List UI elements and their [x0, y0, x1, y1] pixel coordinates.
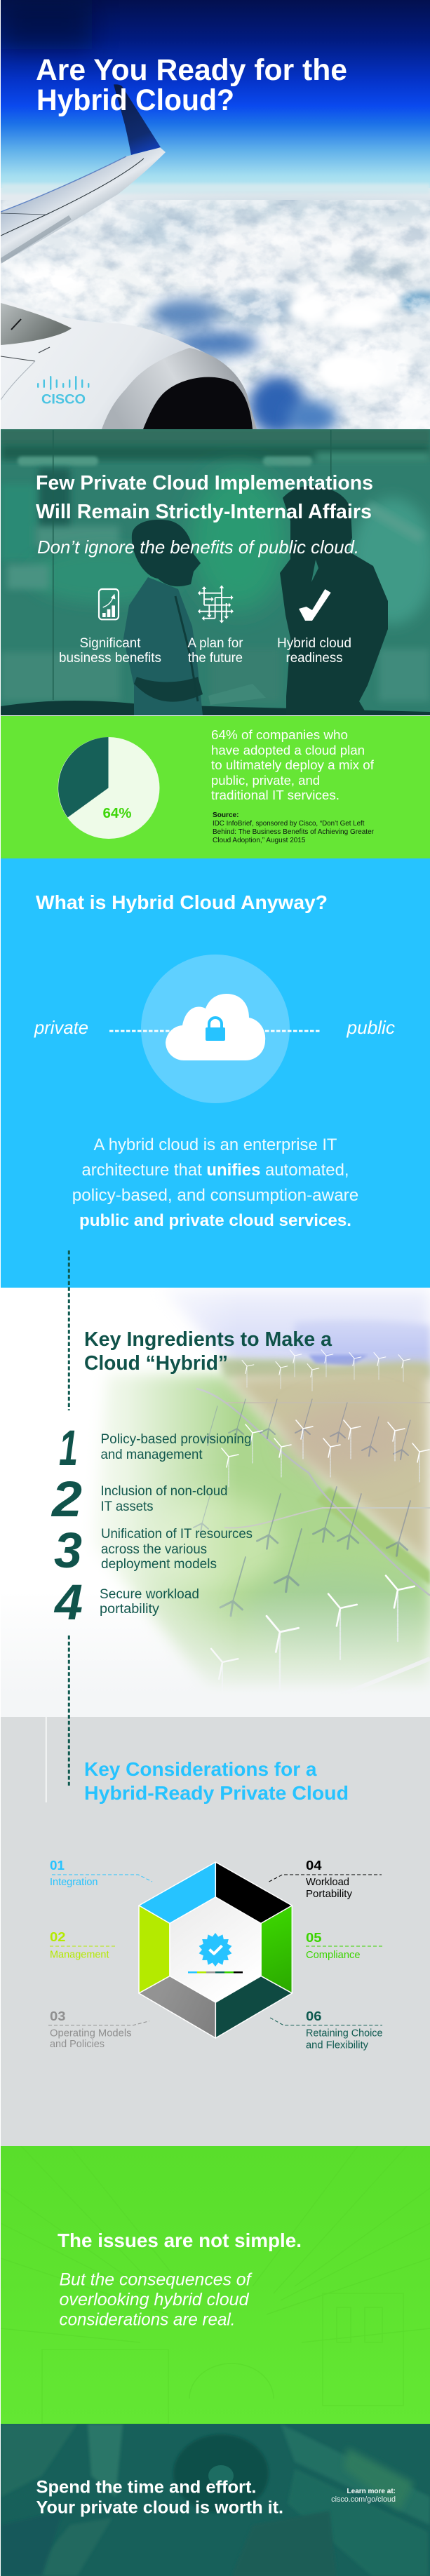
list item 3: across the various [101, 1542, 207, 1557]
italic text [59, 2271, 253, 2329]
callout 01 integration: Integration [50, 1877, 98, 1888]
list item 2: 2 [51, 1472, 82, 1528]
statistic text [211, 727, 375, 802]
callout 03 operating models [48, 2009, 149, 2050]
panel: few private cloud implementations [1, 429, 430, 715]
callout 04 workload portability: Portability [306, 1889, 353, 1900]
icon: cisco logo: CISCO [41, 391, 86, 407]
icon: engine [1, 298, 257, 429]
icon: check mark [299, 589, 331, 621]
benefit: significant business benefits: business benefits [59, 651, 161, 666]
callout 05 compliance: Compliance [306, 1950, 361, 1961]
list item 4: portability [100, 1602, 160, 1617]
photo texture: factory coil tinted teal [1, 2424, 430, 2576]
title [36, 54, 347, 117]
statistic text: 64% of companies who [211, 727, 348, 742]
closing message: Spend the time and effort. [36, 2478, 257, 2497]
list item 1: Policy-based provisioning [101, 1432, 251, 1447]
pie chart: 64 percent: 64% [102, 805, 132, 821]
list item 3: deployment models [101, 1557, 217, 1572]
heading: What is Hybrid Cloud Anyway? [36, 891, 328, 913]
callout 01 integration: 01 [50, 1858, 65, 1873]
italic text: overlooking hybrid cloud [59, 2291, 250, 2309]
diagram: private to public through secure cloud [34, 955, 395, 1103]
closing message [36, 2478, 283, 2518]
hexagon diagram [139, 1862, 292, 2038]
source note: Behind: The Business Benefits of Achieving Greater [213, 828, 375, 836]
subheading: Don’t ignore the benefits of public cloud. [37, 538, 359, 558]
panel: key considerations [1, 1717, 430, 2146]
benefit: significant business benefits: Significant [80, 636, 141, 651]
diagram: private to public through secure cloud: public [346, 1018, 395, 1038]
callout 05 compliance: 05 [306, 1930, 321, 1945]
italic text: But the consequences of [59, 2271, 253, 2290]
learn more link: Learn more at: [347, 2488, 396, 2495]
panel: what is hybrid cloud [1, 858, 430, 1288]
panel: the issues are not simple [1, 2146, 430, 2424]
list item 3: 3 [54, 1523, 82, 1579]
silhouette: man [280, 486, 388, 715]
statistic text: traditional IT services. [211, 788, 340, 802]
panel: hero [1, 0, 430, 442]
icon: verified badge [199, 1933, 231, 1967]
callout 06 retaining choice [270, 2009, 383, 2051]
heading [84, 1758, 349, 1804]
callout 03 operating models: and Policies [50, 2039, 105, 2050]
benefit: hybrid cloud readiness: readiness [286, 651, 342, 666]
definition text: public and private cloud services. [79, 1211, 351, 1230]
italic text: considerations are real. [59, 2310, 236, 2329]
statistic text: to ultimately deploy a mix of [211, 757, 375, 772]
benefit: a plan for the future: the future [188, 651, 243, 666]
list item 1: 1 [59, 1421, 78, 1476]
icon: cisco logo [37, 376, 89, 407]
photo texture: factory interior tinted green [1, 2146, 430, 2424]
callout 01 integration [50, 1858, 152, 1888]
list item 1: and management [101, 1448, 203, 1462]
heading: Will Remain Strictly-Internal Affairs [36, 501, 372, 523]
diagram: private to public through secure cloud: private [34, 1018, 88, 1038]
statistic text: public, private, and [211, 773, 320, 788]
benefit: significant business benefits [59, 589, 161, 666]
callout 06 retaining choice: Retaining Choice [306, 2028, 383, 2039]
icon: phone with growth chart [99, 589, 119, 619]
photo: two colleagues in silhouette [1, 429, 430, 715]
heading [36, 472, 373, 523]
callout 06 retaining choice: 06 [306, 2009, 321, 2023]
callout 05 compliance [306, 1930, 382, 1961]
learn more link: cisco.com/go/cloud [331, 2495, 396, 2504]
panel: closing call to action [1, 2424, 430, 2576]
list item 2: Inclusion of non-cloud [101, 1484, 227, 1499]
source note: IDC InfoBrief, sponsored by Cisco, “Don’t Get Left [213, 820, 365, 828]
callout 02 management: Management [50, 1950, 109, 1961]
learn more link [331, 2488, 396, 2504]
callout 04 workload portability [269, 1858, 382, 1900]
closing message: Your private cloud is worth it. [36, 2498, 283, 2518]
callout 04 workload portability: Workload [306, 1877, 349, 1888]
heading: The issues are not simple. [58, 2230, 302, 2251]
callout 02 management [50, 1929, 116, 1961]
panel: 64 percent statistic [1, 716, 430, 858]
heading: Key Ingredients to Make a [84, 1328, 332, 1351]
definition text [72, 1135, 358, 1230]
list item 1 [59, 1421, 251, 1476]
panel: key ingredients [1, 1288, 430, 1717]
pie chart: 64 percent [58, 737, 160, 839]
definition text: policy-based, and consumption-aware [72, 1186, 358, 1205]
benefit: a plan for the future [188, 585, 243, 666]
list item 3: Unification of IT resources [101, 1527, 253, 1542]
connector: dashed vertical line [68, 1250, 70, 1786]
list item 4: Secure workload [100, 1587, 199, 1602]
source note: Cloud Adoption,” August 2015 [213, 837, 306, 844]
callout 04 workload portability: 04 [306, 1858, 322, 1873]
list item 3 [54, 1523, 253, 1579]
heading [84, 1328, 332, 1375]
callout 06 retaining choice: and Flexibility [306, 2039, 369, 2051]
title: Are You Ready for the [36, 54, 347, 87]
heading: Few Private Cloud Implementations [36, 472, 373, 494]
list item 4 [53, 1575, 199, 1631]
heading: Hybrid-Ready Private Cloud [84, 1782, 349, 1804]
heading: Cloud “Hybrid” [84, 1352, 228, 1375]
statistic text: have adopted a cloud plan [211, 743, 365, 757]
benefit: hybrid cloud readiness [277, 589, 351, 666]
photo: wind turbine landscape fading to white [1, 1288, 430, 1717]
silhouette: woman [123, 520, 266, 715]
definition text: architecture that unifies automated, [81, 1161, 349, 1180]
callout 03 operating models: 03 [50, 2009, 66, 2023]
benefit: hybrid cloud readiness: Hybrid cloud [277, 636, 351, 651]
icon: cloud with padlock [166, 994, 265, 1060]
list item 2 [51, 1472, 227, 1528]
icon: crossing arrows grid [198, 585, 234, 623]
legend bar [188, 1971, 243, 1974]
definition text: A hybrid cloud is an enterprise IT [94, 1135, 337, 1154]
callout 02 management: 02 [50, 1929, 66, 1944]
source note: Source: [213, 811, 238, 819]
list item 4: 4 [53, 1575, 83, 1631]
heading: Key Considerations for a [84, 1758, 317, 1780]
benefit: a plan for the future: A plan for [188, 636, 243, 651]
hero photo: sky, clouds, wing and engine [1, 0, 430, 442]
title: Hybrid Cloud? [36, 84, 234, 117]
source note [213, 811, 375, 844]
callout 03 operating models: Operating Models [50, 2028, 132, 2039]
icon: wing [1, 84, 166, 264]
list item 2: IT assets [101, 1499, 153, 1514]
